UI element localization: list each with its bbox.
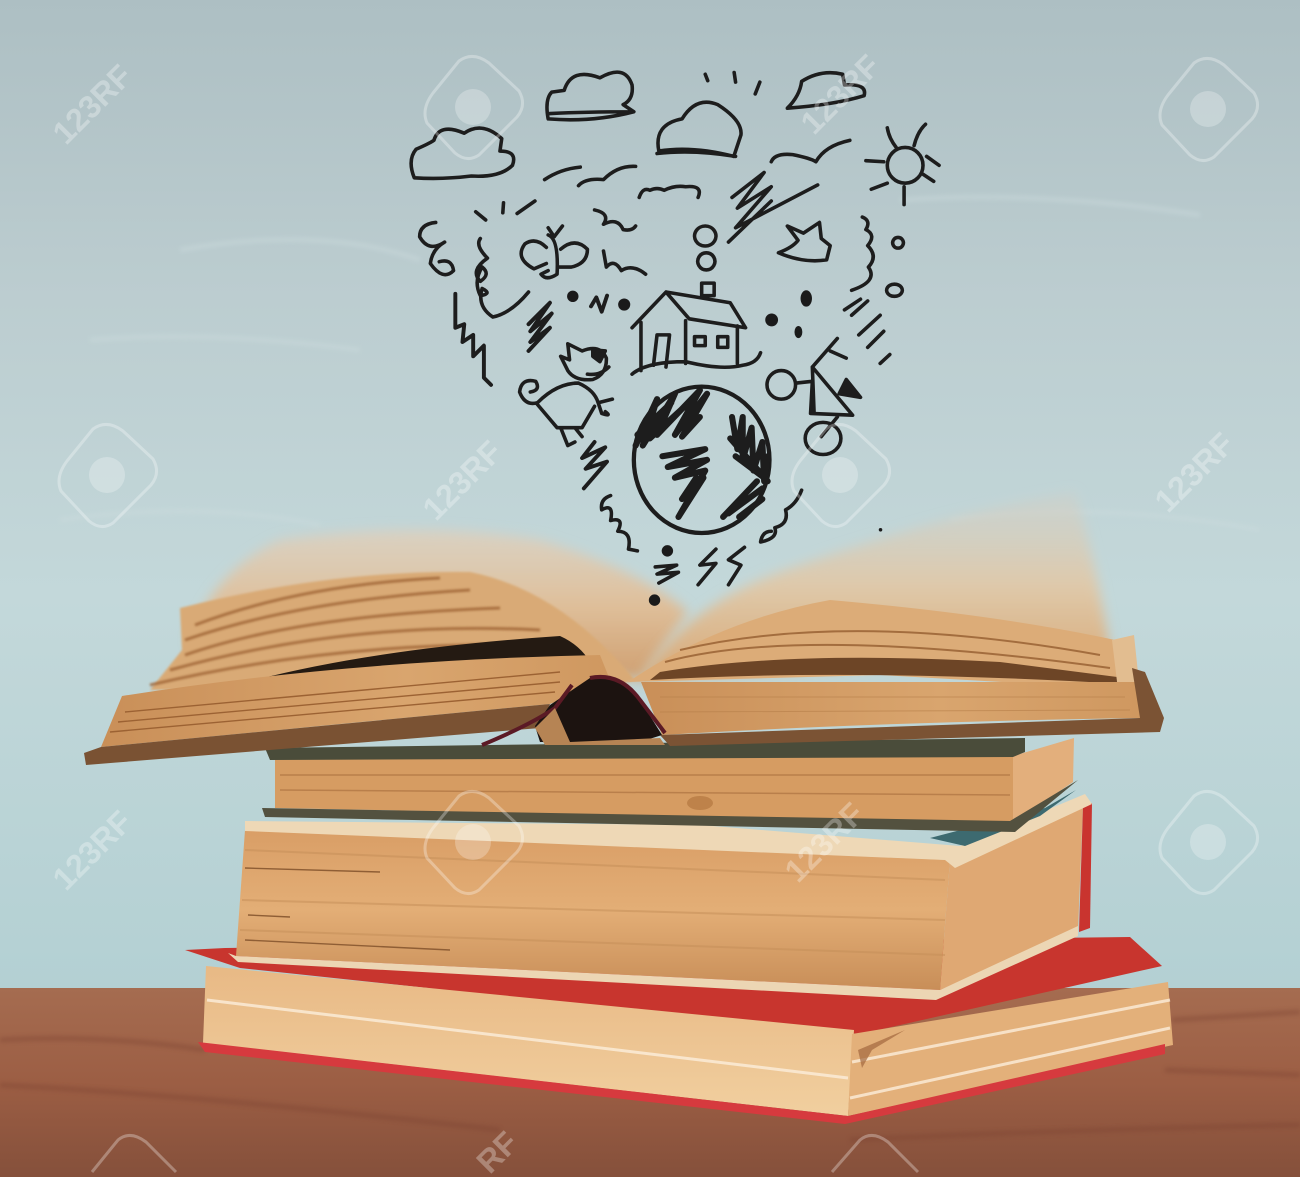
open page stack right (628, 600, 1140, 690)
icon: cat (520, 344, 612, 446)
icon: scribble lines (595, 172, 818, 274)
icon: cloud centre (657, 102, 741, 156)
doodles: hand-drawn sketches rising from the book (411, 72, 939, 605)
icon: right squiggles (844, 217, 890, 363)
icon: ticks (476, 72, 760, 220)
left page block (101, 655, 610, 747)
icon: cloud top right (787, 73, 865, 108)
icon: bird strokes (545, 140, 850, 186)
book 1: open book (84, 492, 1164, 765)
icon: curls and bottom zigzags (601, 490, 802, 585)
right page block (641, 682, 1140, 735)
left cover (84, 704, 550, 765)
right cover (660, 668, 1164, 746)
book 3: large middle book (228, 790, 1092, 1000)
wooden table (0, 988, 1300, 1177)
watermark: 123RF stamps: 123RF (778, 796, 871, 889)
icon: cloud left (411, 128, 514, 178)
open page fan left (150, 572, 635, 690)
icon: dove (778, 222, 830, 261)
icon: earth globe (634, 387, 769, 533)
icon: house (632, 283, 761, 374)
watermark: 123RF stamps: 123RF (1148, 426, 1241, 519)
watermark: 123RF stamps: 123RF (46, 804, 139, 897)
watermark: 123RF stamps: 123RF (794, 48, 887, 141)
flying blurred pages (190, 492, 1110, 680)
icon: cloud top (547, 72, 634, 120)
icon: zigzags (455, 294, 607, 488)
book 4: bottom red book (185, 937, 1173, 1124)
watermark: 123RF stamps: 123RF (46, 58, 139, 151)
spine with ribbon (535, 677, 662, 742)
icon: spirals left (420, 222, 529, 317)
icon: bubbles (695, 226, 903, 296)
icon: dots (567, 291, 882, 605)
icon: sun (866, 124, 939, 205)
watermark: 123RF stamps: 123RF (416, 434, 509, 527)
book 2: upper closed book (262, 738, 1078, 832)
icon: butterfly (521, 226, 587, 278)
icon: bicycle (767, 338, 861, 454)
